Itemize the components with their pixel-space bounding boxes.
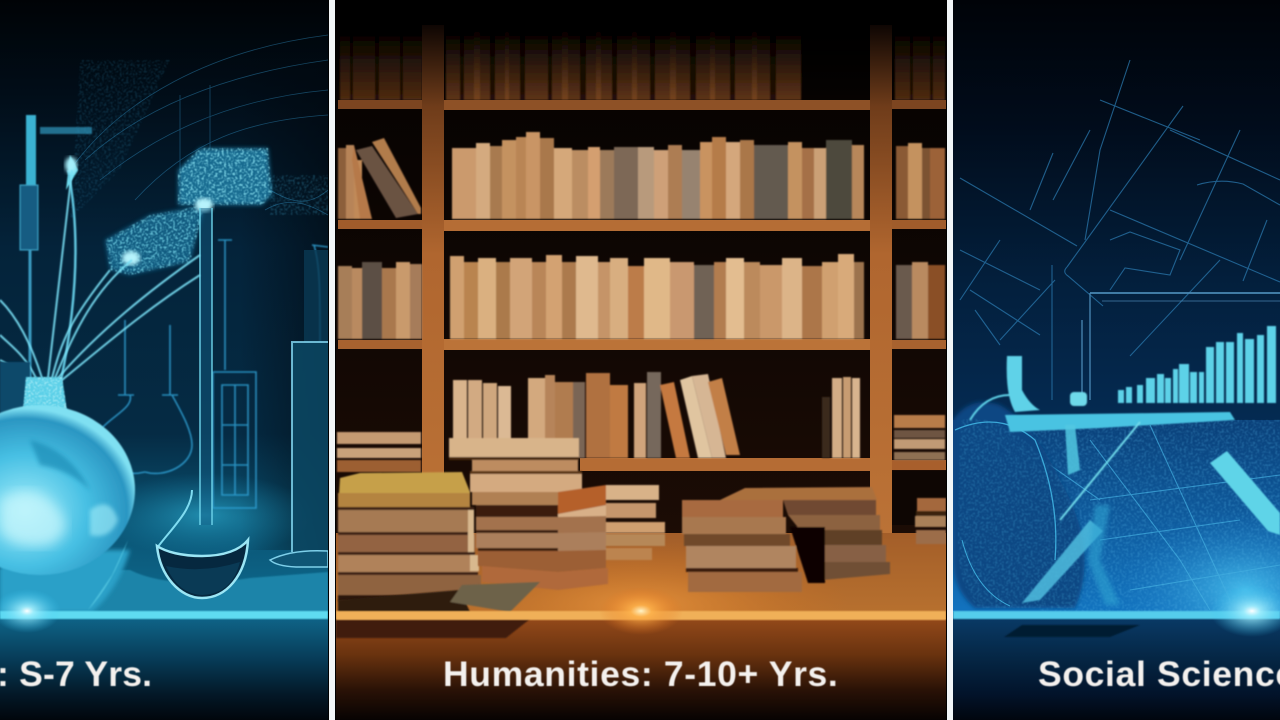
- illustration: open book shadow: [336, 619, 530, 638]
- illustration: wooden shelf frame: [338, 25, 946, 535]
- illustration: map grid lines: [960, 60, 1280, 400]
- illustration: network arcs: [70, 35, 328, 215]
- illustration: book stack centre: [449, 438, 665, 590]
- light beam: [0, 592, 328, 632]
- illustration: dark plane shadow: [1004, 625, 1140, 637]
- illustration: side shelf books: [337, 138, 945, 472]
- light beam: [336, 595, 946, 633]
- panel: social science data map: [953, 0, 1280, 720]
- panel footer: [953, 618, 1280, 720]
- illustration: branching energy streams: [0, 170, 200, 385]
- illustration: glowing nodes and horizon: [970, 356, 1235, 520]
- illustration: small round flask: [157, 490, 248, 598]
- illustration: background glassware: [95, 240, 328, 508]
- label: Humanities: 7-10+ Yrs.: [443, 654, 838, 694]
- illustration: large glowing flask: [0, 377, 135, 612]
- illustration: left water band: [0, 362, 30, 417]
- bar chart: [1118, 326, 1276, 403]
- panel: humanities bookshelf: [336, 0, 946, 720]
- illustration: water tank: [270, 250, 328, 567]
- illustration: book row 2: [452, 132, 864, 219]
- illustration: globe with figure: [953, 402, 1120, 608]
- panel footer: [0, 618, 328, 720]
- illustration: floor: [0, 570, 328, 615]
- illustration: left stand: [20, 115, 92, 390]
- illustration: bright wedge: [1210, 451, 1280, 535]
- light beam: [953, 585, 1280, 637]
- illustration: book row 4: [453, 372, 860, 458]
- illustration: frame lines: [1082, 293, 1280, 400]
- illustration: desk surface: [336, 471, 946, 619]
- label: : S-7 Yrs.: [0, 654, 152, 694]
- illustration: central rod: [200, 208, 212, 525]
- illustration: top shelf dark books: [339, 32, 946, 100]
- illustration: book stack left: [338, 472, 481, 601]
- illustration: open book: [338, 582, 540, 612]
- panel footer: [336, 619, 946, 720]
- illustration: book row 3: [450, 254, 864, 339]
- illustration: lower data plane: [953, 420, 1280, 618]
- divider: [329, 0, 335, 720]
- divider: [947, 0, 953, 720]
- illustration: speckled clouds: [65, 60, 328, 275]
- illustration: book stacks right: [682, 487, 946, 592]
- panel: sciences laboratory: [0, 0, 328, 720]
